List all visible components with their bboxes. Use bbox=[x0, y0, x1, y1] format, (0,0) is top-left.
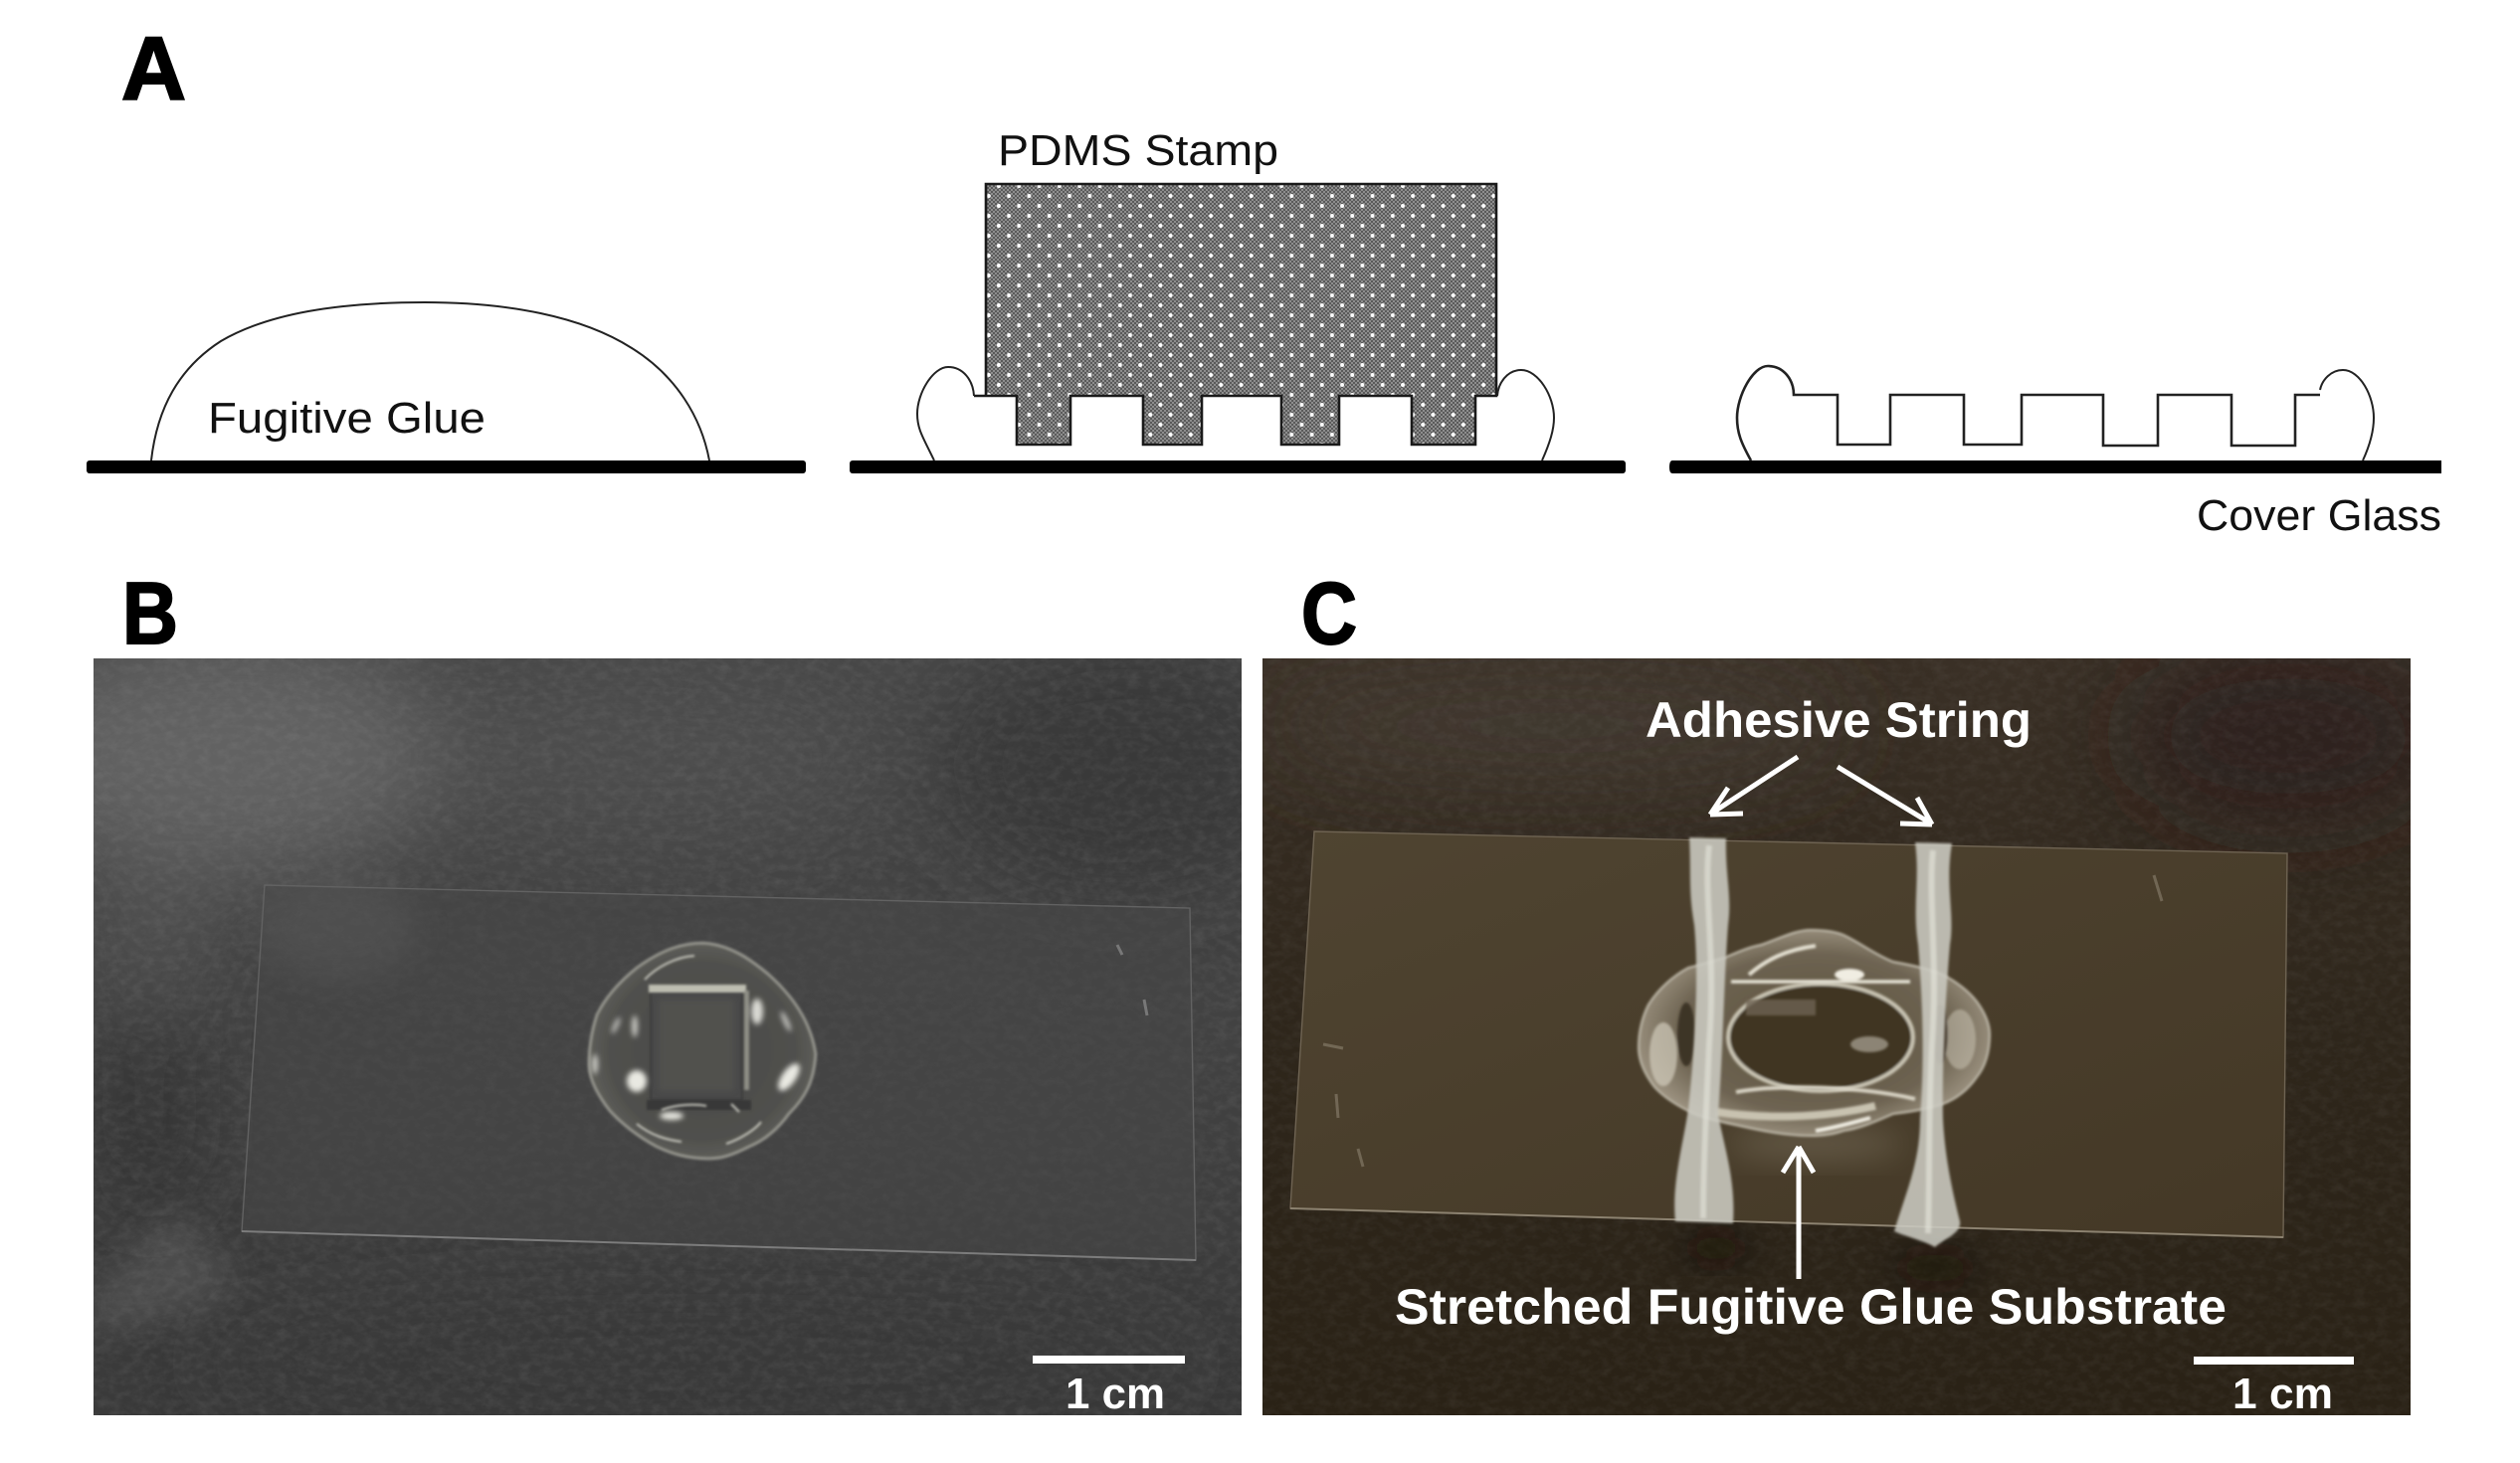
glue squeezed left bbox=[917, 367, 974, 460]
heading: panel letter A: A bbox=[121, 20, 186, 119]
label: cover glass: Cover Glass bbox=[2197, 491, 2441, 540]
scale bar B bbox=[1033, 1356, 1185, 1408]
well edges bbox=[647, 985, 751, 1110]
glue droplet with stamped square bbox=[589, 943, 816, 1159]
texture bbox=[94, 658, 1242, 1415]
patterned glue surface bbox=[1737, 366, 2320, 460]
label: adhesive string: Adhesive String bbox=[1646, 692, 2032, 748]
arrow: to left string bbox=[1710, 757, 1798, 815]
cover glass bar 2 bbox=[850, 460, 1626, 473]
central lens bbox=[1728, 984, 1913, 1091]
adhesive string left bbox=[1674, 837, 1733, 1223]
step 2: PDMS stamp pressed into glue bbox=[850, 126, 1626, 473]
scale bar C bbox=[2194, 1357, 2354, 1418]
step 1: fugitive glue droplet on cover glass bbox=[87, 302, 806, 473]
step 3: patterned glue after stamp removal bbox=[1669, 366, 2441, 540]
cover glass bar 1 bbox=[87, 460, 806, 473]
droplet highlights bbox=[592, 999, 804, 1120]
glass slide bbox=[242, 880, 1196, 1260]
stamp body with teeth bbox=[974, 184, 1496, 445]
glue dome bbox=[151, 302, 709, 460]
cover glass bar 3 bbox=[1669, 460, 2441, 473]
stamped square well bbox=[651, 993, 742, 1100]
arrow: to stretched substrate bbox=[1783, 1147, 1814, 1279]
glue squeezed right bbox=[1497, 370, 1554, 460]
glue rim right bbox=[2320, 370, 2374, 460]
heading: panel letter C: C bbox=[1301, 564, 1357, 662]
heading: panel letter B: B bbox=[122, 564, 178, 662]
scale label B: 1 cm bbox=[1066, 1370, 1165, 1418]
panel: A schematic bbox=[87, 20, 2441, 540]
glass slide bbox=[1290, 831, 2287, 1283]
arrow: to right string bbox=[1838, 767, 1932, 824]
adhesive string right bbox=[1894, 842, 1960, 1247]
label: fugitive glue: Fugitive Glue bbox=[208, 394, 485, 443]
label: PDMS stamp: PDMS Stamp bbox=[998, 126, 1278, 175]
scale label C: 1 cm bbox=[2232, 1370, 2333, 1418]
panel: B photo of glue on slide bbox=[94, 658, 1242, 1415]
stretched glue droplet bbox=[1639, 930, 1990, 1136]
panel: C photo of stretched glue bbox=[1254, 646, 2447, 1418]
label: stretched fugitive glue substrate: Stretched Fugitive Glue Substrate bbox=[1395, 1279, 2227, 1335]
droplet highlights bbox=[1649, 946, 1976, 1131]
texture bbox=[1262, 658, 2411, 1415]
